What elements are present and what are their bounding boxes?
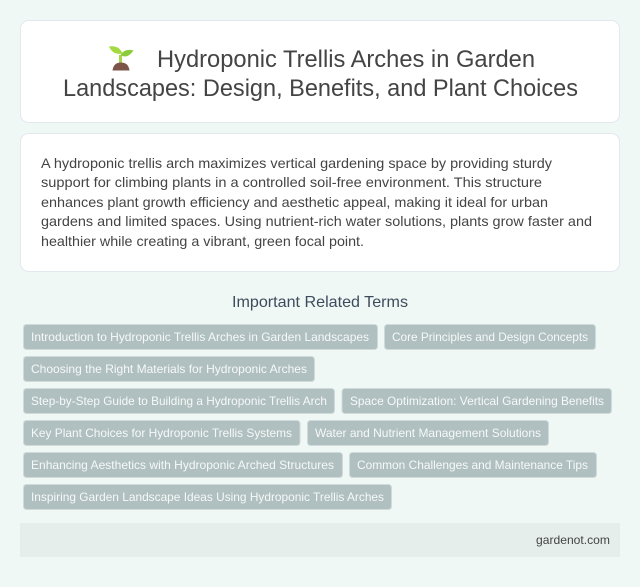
chip: enhancing aesthetics bbox=[24, 452, 342, 478]
chip: step-by-step: Step-by-Step Guide to Building a Hydroponic Trellis Arch bbox=[31, 394, 327, 408]
chip: water and nutrient: Water and Nutrient Management Solutions bbox=[315, 426, 541, 440]
heading: title: Hydroponic Trellis Arches in Garden bbox=[157, 46, 535, 73]
footer bbox=[20, 523, 620, 557]
chip: inspiring ideas bbox=[24, 484, 392, 510]
chip: core principles bbox=[384, 324, 596, 350]
chip: core principles: Core Principles and Design Concepts bbox=[392, 330, 588, 344]
text block: description: enhances plant growth efficiency and aesthetic appeal, making it ideal for urban bbox=[41, 194, 548, 210]
heading: title bbox=[63, 46, 578, 102]
chip: space optimization bbox=[342, 388, 612, 414]
chip: introduction: Introduction to Hydroponic Trellis Arches in Garden Landscapes bbox=[31, 330, 369, 344]
text block: description: gardens and limited spaces. Using nutrient-rich water solutions, plants grow faster and bbox=[41, 213, 592, 229]
chip: materials: Choosing the Right Materials for Hydroponic Arches bbox=[31, 362, 307, 376]
chip: space optimization: Space Optimization: Vertical Gardening Benefits bbox=[350, 394, 604, 408]
heading: title: Landscapes: Design, Benefits, and Plant Choices bbox=[63, 75, 578, 102]
chip: inspiring ideas: Inspiring Garden Landscape Ideas Using Hydroponic Trellis Arches bbox=[31, 490, 384, 504]
chip: key plant choices bbox=[24, 420, 300, 446]
chip: materials bbox=[24, 356, 314, 382]
text block: description bbox=[41, 155, 592, 249]
panel: related terms chips bbox=[24, 324, 612, 510]
chip: common challenges: Common Challenges and Maintenance Tips bbox=[357, 458, 588, 472]
heading: important related terms: Important Related Terms bbox=[232, 294, 408, 311]
chip: key plant choices: Key Plant Choices for Hydroponic Trellis Systems bbox=[31, 426, 292, 440]
text: site name: gardenot.com bbox=[536, 533, 610, 547]
chip: water and nutrient bbox=[308, 420, 548, 446]
panel: description card bbox=[20, 134, 620, 272]
chip: step-by-step bbox=[24, 388, 334, 414]
text block: description: A hydroponic trellis arch maximizes vertical gardening space by providing sturdy bbox=[41, 155, 552, 171]
chip: introduction bbox=[24, 324, 378, 350]
chip: enhancing aesthetics: Enhancing Aesthetics with Hydroponic Arched Structures bbox=[31, 458, 334, 472]
text block: description: support for climbing plants in a controlled soil-free environment. This structure bbox=[41, 174, 542, 190]
icon: seedling bbox=[109, 46, 134, 70]
text block: description: healthier while creating a vibrant, green focal point. bbox=[41, 233, 364, 249]
chip: common challenges bbox=[350, 452, 596, 478]
panel: title card bbox=[20, 20, 620, 122]
